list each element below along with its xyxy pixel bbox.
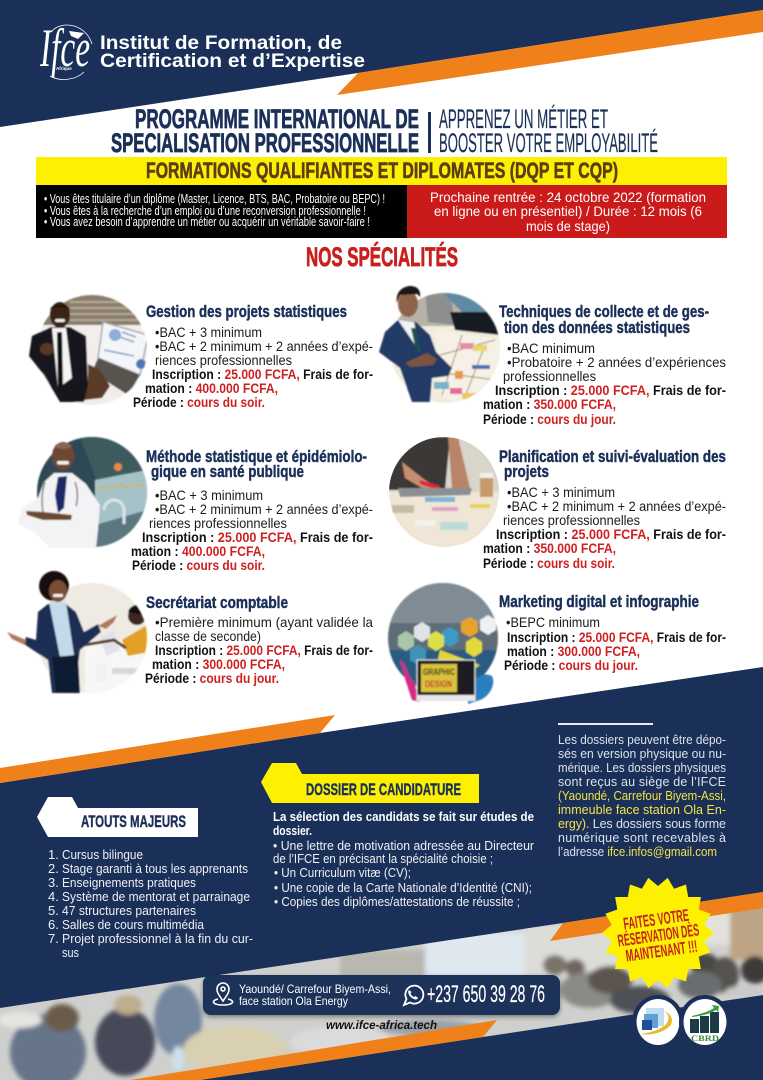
icon: location pin	[213, 983, 233, 1005]
list: atouts majeurs: 3.	[48, 875, 59, 890]
list: atouts majeurs	[48, 847, 253, 960]
tag: atouts majeurs	[37, 797, 198, 837]
badge: réservation	[602, 878, 714, 988]
text: techniques de collecte: •BAC minimum	[507, 340, 595, 356]
text: méthode statistique: Inscription : 25.000 FCFA, Frais de for-	[142, 529, 373, 545]
logo: IFCE	[39, 18, 92, 79]
text: application file: de l’IFCE en précisant la spécialité choisie ;	[273, 851, 493, 866]
partner logo: CBRD	[679, 995, 731, 1049]
list: atouts majeurs: Enseignements pratiques	[62, 875, 196, 890]
list: atouts majeurs: Salles de cours multimédia	[62, 917, 205, 932]
bottom orange stripe left	[0, 715, 335, 783]
text: méthode statistique: riences professionnelles	[149, 515, 287, 531]
badge: réservation: MAINTENANT !!!	[625, 937, 699, 966]
text: submission details: sont reçus au siège de l’IFCE	[558, 775, 726, 789]
text: planification et suivi-évaluation: Période : cours du soir.	[483, 555, 615, 571]
list: atouts majeurs: 1.	[48, 847, 59, 862]
text: secrétariat comptable	[145, 594, 373, 686]
partner logo: blue squares	[632, 995, 684, 1049]
tag: dossier de candidature: DOSSIER DE CANDIDATURE	[306, 780, 461, 799]
text: application file: dossier.	[273, 823, 312, 838]
text: application file: La sélection des candidats se fait sur études de	[273, 809, 534, 824]
red panel: next intake	[407, 185, 727, 238]
photo: businessman with charts	[379, 286, 505, 410]
partner logo: CBRD: CBRD	[691, 1034, 719, 1043]
orange stripe bottom	[130, 1020, 497, 1080]
text: application file: • Une copie de la Carte Nationale d’Identité (CNI);	[274, 880, 532, 895]
text: techniques de collecte: Période : cours du jour.	[483, 411, 616, 427]
heading separator	[428, 112, 431, 153]
photo: graphic design	[388, 583, 498, 704]
list: atouts majeurs: 47 structures partenaires	[62, 903, 196, 918]
logo: IFCE: Ifce	[39, 18, 90, 78]
text: secrétariat comptable: classe de seconde)	[155, 628, 261, 644]
header title	[100, 33, 365, 72]
orange stripe right	[550, 892, 763, 941]
black panel: audience: • Vous êtes à la recherche d’un emploi ou d’une reconversion professionnelle !	[44, 204, 366, 218]
tag: dossier de candidature	[261, 763, 479, 803]
text: techniques de collecte: mation : 350.000 FCFA,	[483, 396, 616, 412]
text: marketing digital: •BEPC minimum	[506, 614, 600, 630]
list: atouts majeurs: Projet professionnel à la fin du cur-	[62, 931, 253, 946]
contact bar: face station Ola Energy	[239, 994, 348, 1008]
text: secrétariat comptable: •Première minimum (ayant validée la	[155, 614, 373, 630]
contact bar	[203, 975, 560, 1015]
text: techniques de collecte	[483, 303, 726, 427]
text: planification et suivi-évaluation: projets	[504, 463, 549, 481]
text: secrétariat comptable: mation : 300.000 FCFA,	[152, 656, 285, 672]
header title: Institut de Formation, de	[100, 33, 342, 54]
text: submission details: sés en version physique ou nu-	[558, 747, 726, 761]
divider line	[558, 723, 653, 725]
photo: planning meeting	[388, 437, 500, 549]
text: méthode statistique: •BAC + 3 minimum	[155, 487, 263, 503]
tag: atouts majeurs: ATOUTS MAJEURS	[81, 812, 186, 831]
list: atouts majeurs: 4.	[48, 889, 59, 904]
red panel: next intake: mois de stage)	[526, 218, 610, 234]
text: marketing digital: Marketing digital et infographie	[499, 593, 699, 611]
text: secrétariat comptable: Période : cours du jour.	[145, 670, 279, 686]
text: gestion des projets statistiques: Inscription : 25.000 FCFA, Frais de for-	[152, 366, 373, 382]
logo: IFCE: Afrique	[56, 66, 72, 71]
text: méthode statistique: gique en santé publique	[151, 463, 304, 481]
top navy banner	[0, 0, 763, 127]
text: techniques de collecte: •Probatoire + 2 années d’expériences	[507, 354, 726, 370]
text: submission details: numérique sont recevables à	[558, 831, 726, 845]
text: application file: • Une lettre de motivation adressée au Directeur	[273, 838, 535, 853]
black panel: audience	[36, 185, 407, 238]
contact bar: Yaoundé/ Carrefour Biyem-Assi,	[239, 982, 391, 996]
text: techniques de collecte: Inscription : 25.000 FCFA, Frais de for-	[495, 382, 726, 398]
text: gestion des projets statistiques	[133, 303, 373, 410]
text: planification et suivi-évaluation	[483, 448, 726, 571]
programme heading: PROGRAMME INTERNATIONAL DE	[135, 104, 419, 134]
text: techniques de collecte: Techniques de collecte et de ges-	[499, 303, 709, 321]
text: gestion des projets statistiques: Gestion des projets statistiques	[146, 303, 347, 321]
text: planification et suivi-évaluation: mation : 350.000 FCFA,	[483, 540, 616, 556]
text: secrétariat comptable: Secrétariat comptable	[146, 594, 288, 612]
text: marketing digital: Période : cours du jour.	[504, 657, 638, 673]
list: atouts majeurs: 6.	[48, 917, 59, 932]
text: submission details: l’adresse ifce.infos@gmail.com	[558, 845, 717, 859]
website url: www.ifce-africa.tech	[326, 1018, 437, 1032]
text: submission details: (Yaoundé, Carrefour Biyem-Assi,	[558, 789, 726, 803]
photo: businessman with laptop	[29, 295, 148, 405]
red panel: next intake: en ligne ou en présentiel) / Durée : 12 mois (6	[434, 203, 702, 219]
text: gestion des projets statistiques: •BAC + 3 minimum	[155, 324, 262, 340]
text: gestion des projets statistiques: Période : cours du soir.	[133, 394, 265, 410]
text: techniques de collecte: tion des données statistiques	[504, 319, 690, 337]
text: submission details: Les dossiers peuvent être dépo-	[558, 733, 726, 747]
text: méthode statistique: Méthode statistique et épidémiolo-	[146, 448, 367, 466]
text: techniques de collecte: professionnelles	[503, 368, 596, 384]
header title: Certification et d’Expertise	[100, 51, 365, 72]
black panel: audience: • Vous avez besoin d’apprendre un métier ou acquérir un véritable savoir-faire !	[44, 215, 370, 229]
photo: businesswoman	[7, 571, 150, 695]
text: planification et suivi-évaluation: •BAC + 3 minimum	[507, 484, 615, 500]
text: application file: • Copies des diplômes/attestations de réussite ;	[274, 894, 520, 909]
icon: whatsapp	[404, 986, 423, 1005]
contact bar: +237 650 39 28 76	[427, 981, 545, 1008]
list: atouts majeurs: 2.	[48, 861, 59, 876]
text: application file: • Un Curriculum vitæ (CV);	[274, 865, 411, 880]
text: gestion des projets statistiques: •BAC + 2 minimum + 2 années d’expé-	[155, 338, 373, 354]
text: gestion des projets statistiques: riences professionnelles	[155, 352, 292, 368]
badge: réservation: FAITES VOTRE	[622, 906, 690, 934]
text: gestion des projets statistiques: mation : 400.000 FCFA,	[145, 380, 278, 396]
text: planification et suivi-évaluation: Inscription : 25.000 FCFA, Frais de for-	[496, 526, 726, 542]
list: atouts majeurs: Cursus bilingue	[62, 847, 143, 862]
list: atouts majeurs: Stage garanti à tous les apprenants	[62, 861, 248, 876]
text: méthode statistique: Période : cours du soir.	[132, 557, 265, 573]
black panel: audience: • Vous êtes titulaire d’un diplôme (Master, Licence, BTS, BAC, Probatoire ou BEPC) !	[44, 192, 385, 206]
programme heading	[111, 104, 419, 158]
tagline	[439, 104, 658, 158]
list: atouts majeurs: 7.	[48, 931, 59, 946]
text: marketing digital	[499, 593, 726, 673]
text: méthode statistique: mation : 400.000 FCFA,	[131, 543, 265, 559]
heading: nos spécialités: NOS SPÉCIALITÉS	[306, 241, 458, 272]
text: application file	[273, 809, 535, 909]
photo: graphic design: DESIGN	[425, 679, 452, 689]
text: planification et suivi-évaluation: riences professionnelles	[503, 512, 640, 528]
text: secrétariat comptable: Inscription : 25.000 FCFA, Frais de for-	[155, 642, 373, 658]
text: submission details: ergy). Les dossiers sous forme	[558, 817, 726, 831]
text: submission details: immeuble face station Ola En-	[558, 803, 726, 817]
photo: graphic design: GRAPHIC	[423, 667, 455, 677]
list: atouts majeurs: Système de mentorat et parrainage	[62, 889, 250, 904]
list: atouts majeurs: sus	[62, 945, 79, 960]
text: méthode statistique	[131, 448, 373, 573]
text: marketing digital: Inscription : 25.000 FCFA, Frais de for-	[507, 629, 726, 645]
text: submission details: mérique. Les dossiers physiques	[558, 761, 726, 775]
programme heading: SPECIALISATION PROFESSIONNELLE	[111, 128, 419, 158]
list: atouts majeurs: 5.	[48, 903, 59, 918]
red panel: next intake: Prochaine rentrée : 24 octobre 2022 (formation	[430, 189, 706, 205]
text: marketing digital: mation : 300.000 FCFA,	[507, 643, 640, 659]
top orange stripe	[337, 10, 763, 95]
bottom navy panel	[0, 667, 763, 1080]
photo band: classroom audience	[0, 890, 763, 1080]
text: submission details	[558, 733, 726, 859]
text: planification et suivi-évaluation: •BAC + 2 minimum + 2 années d’expé-	[507, 498, 726, 514]
text: méthode statistique: •BAC + 2 minimum + 2 années d’expé-	[155, 501, 373, 517]
photo: doctor	[18, 437, 147, 548]
